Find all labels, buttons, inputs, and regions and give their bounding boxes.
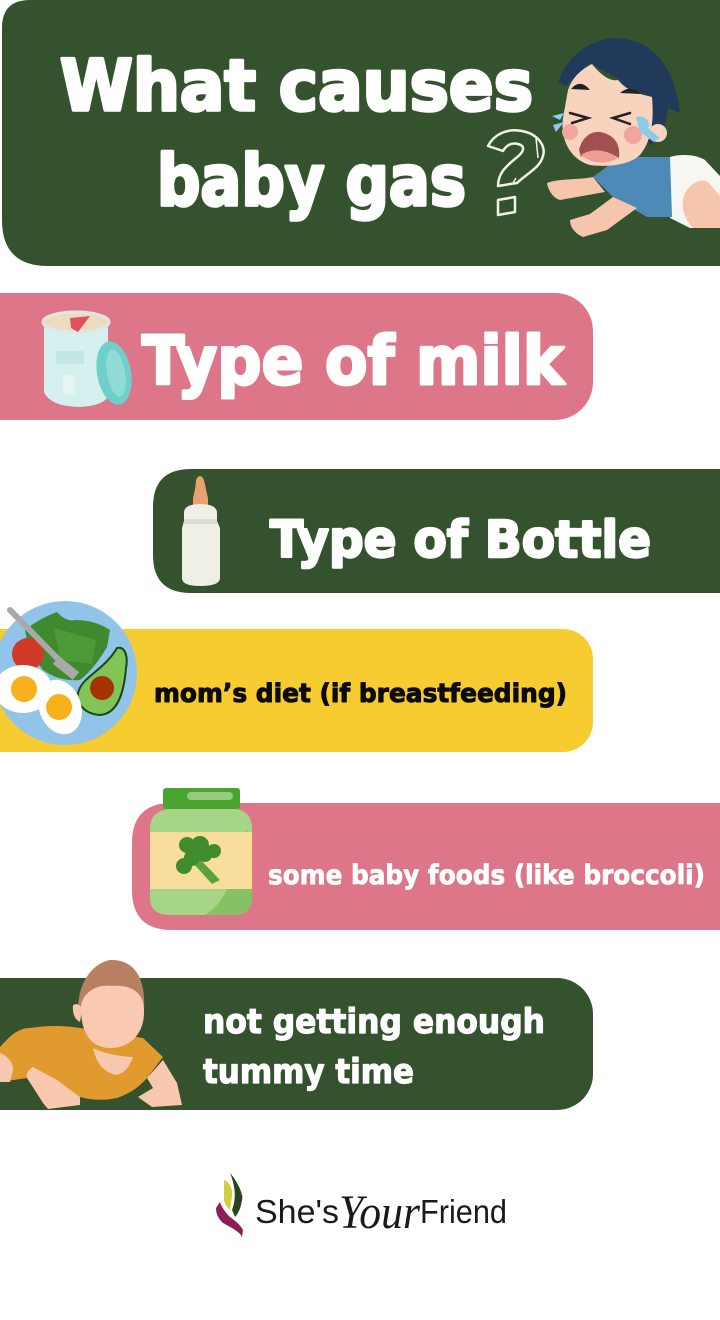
icon: baby bottle — [182, 476, 220, 586]
text: not getting enough — [203, 1002, 545, 1042]
panel: mom's diet — [0, 601, 593, 752]
icon: food plate — [0, 601, 137, 745]
heading: Type of Bottle — [270, 511, 651, 570]
panel: type of milk — [0, 293, 593, 420]
wordmark: Your — [339, 1186, 420, 1239]
text: tummy time — [203, 1052, 414, 1092]
wordmark: Friend — [420, 1193, 507, 1230]
title: What causes — [60, 45, 533, 127]
text: mom’s diet (if breastfeeding) — [154, 679, 567, 709]
icon: question mark — [488, 130, 544, 215]
panel: tummy time — [0, 960, 593, 1110]
icon: baby on tummy — [0, 960, 182, 1109]
panel: baby foods — [132, 788, 720, 930]
icon: broccoli jar — [150, 788, 252, 915]
wordmark: She's — [255, 1193, 339, 1230]
heading: Type of milk — [142, 322, 565, 400]
header panel — [2, 0, 720, 266]
panel: type of bottle — [153, 469, 720, 593]
icon: formula can — [43, 312, 136, 407]
title: baby gas — [157, 140, 466, 222]
logo — [216, 1173, 507, 1239]
text — [203, 1002, 545, 1092]
icon: crying baby — [547, 38, 720, 237]
title — [60, 45, 533, 222]
icon: logo leaves — [216, 1173, 243, 1237]
